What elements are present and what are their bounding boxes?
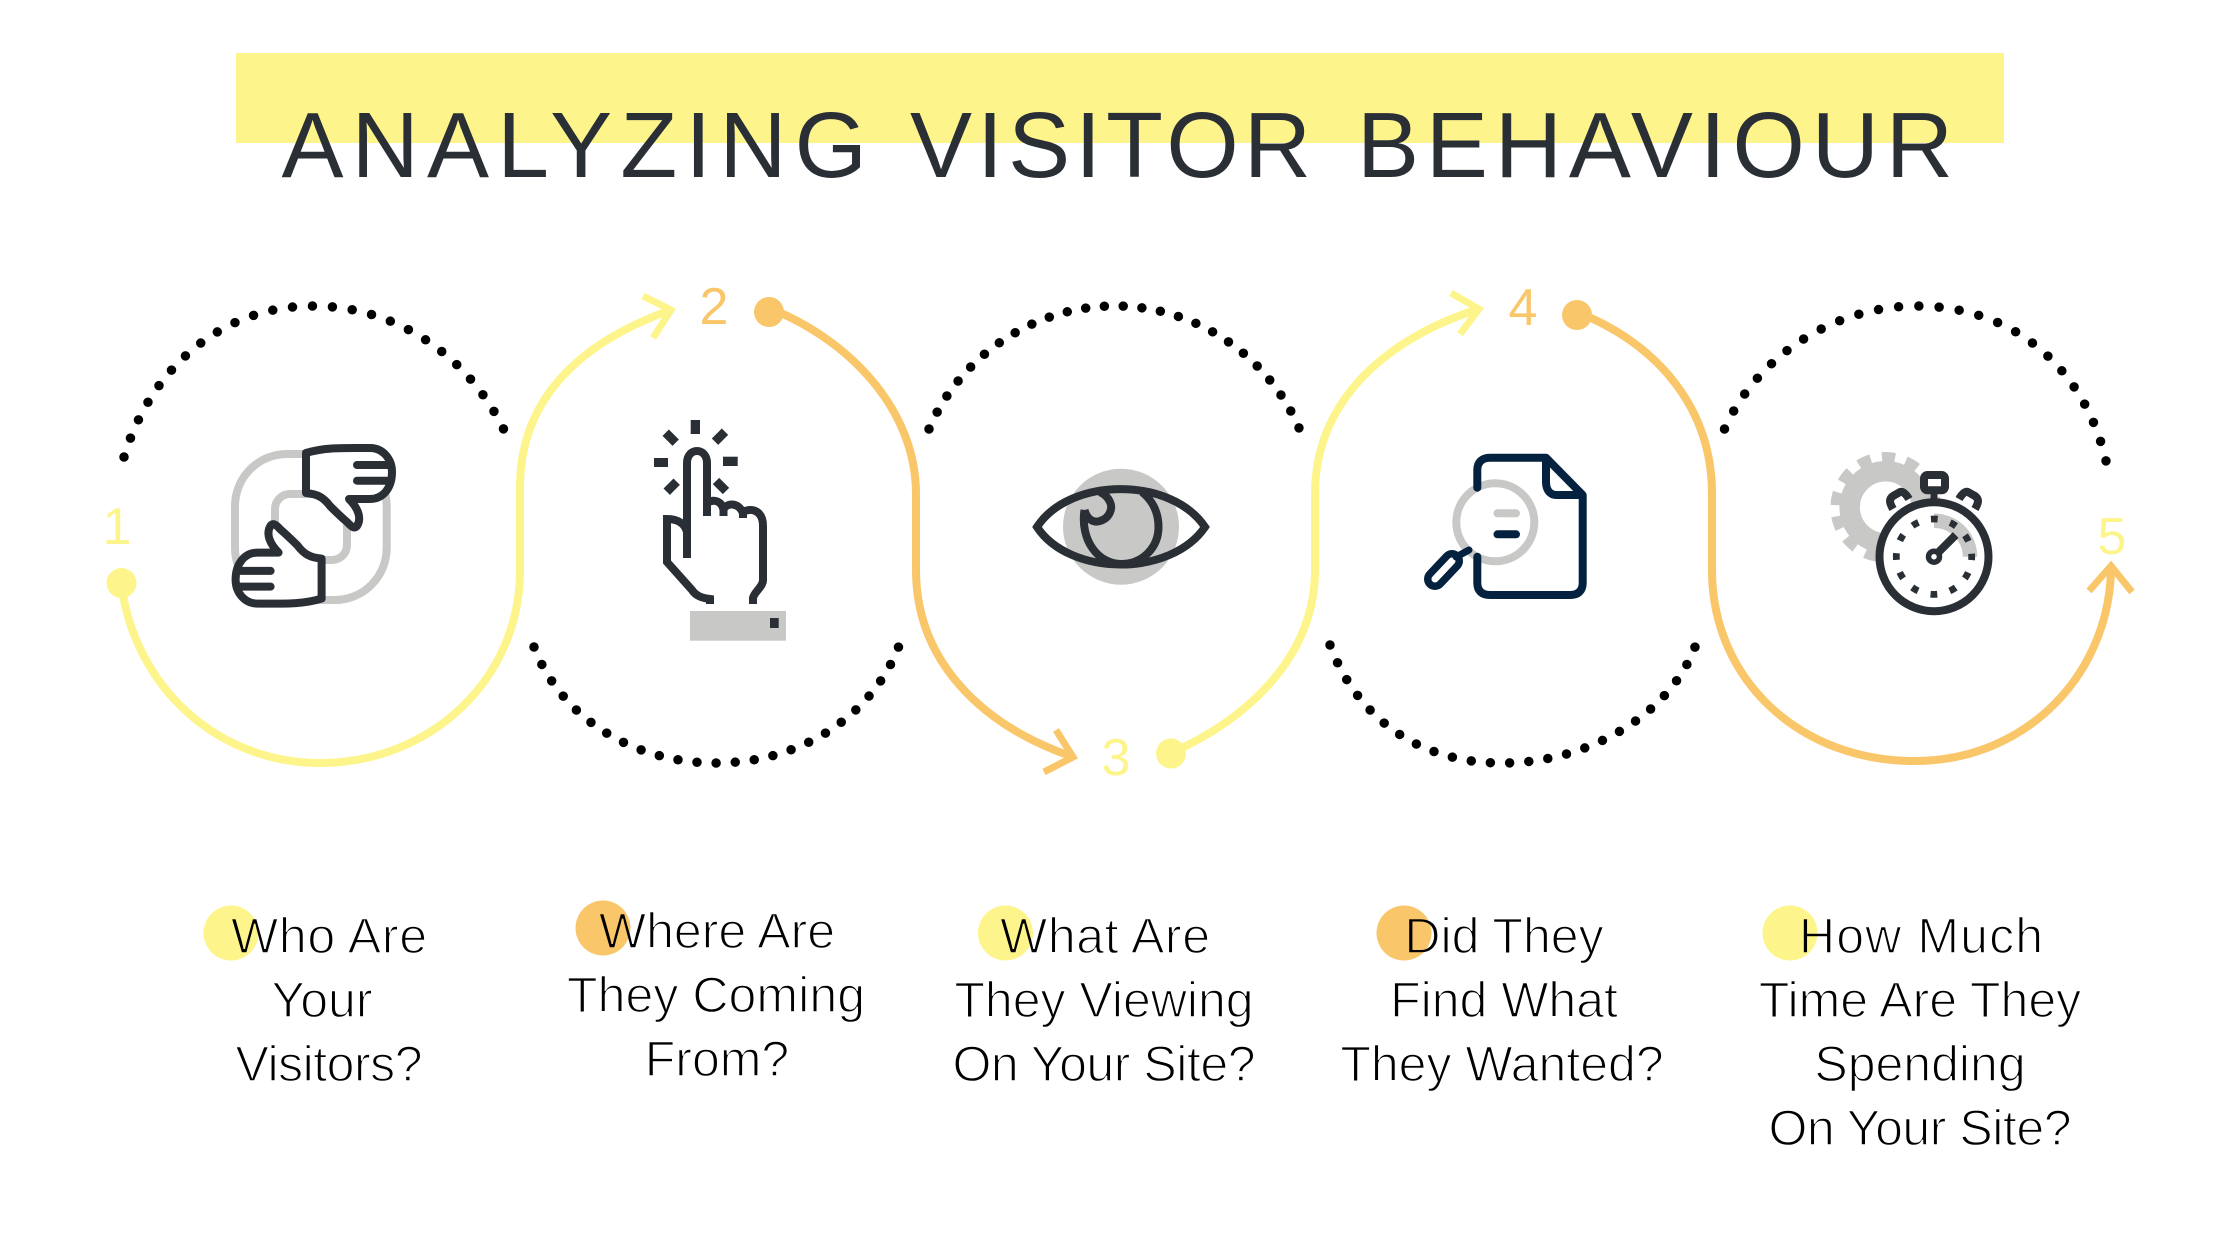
label 2	[567, 900, 865, 1087]
dotted arc: bottom 4	[1330, 645, 1695, 763]
title	[282, 93, 1953, 197]
number 2: 2	[700, 278, 728, 336]
path segment 4: orange loop to step 5	[1562, 300, 2132, 761]
icon: stopwatch and gear	[1824, 445, 1988, 611]
path segment 1: yellow loop to step 2	[106, 296, 671, 763]
label 3: What Are	[1000, 908, 1210, 964]
label 5: Time Are They	[1759, 972, 2081, 1028]
dotted arc: bottom 2	[534, 647, 898, 763]
label 5: Spending	[1814, 1036, 2026, 1092]
dotted arc: top 3	[929, 306, 1299, 429]
label 3: On Your Site?	[952, 1036, 1256, 1092]
title: ANALYZING	[282, 93, 867, 197]
label 4: They Wanted?	[1340, 1036, 1664, 1092]
label 1: Visitors?	[236, 1036, 422, 1092]
path segment 3: yellow curve to step 4	[1156, 293, 1479, 768]
label 2: Where Are	[599, 903, 835, 959]
number 5: 5	[2098, 508, 2126, 566]
icon: document with magnifier	[1435, 458, 1583, 595]
icon: two hands	[235, 448, 392, 604]
label 4: Find What	[1390, 972, 1618, 1028]
label 4: Did They	[1404, 908, 1604, 964]
label 3	[952, 906, 1256, 1092]
number 4: 4	[1509, 279, 1537, 337]
title: BEHAVIOUR	[1357, 93, 1953, 197]
label 1: Your	[271, 972, 373, 1028]
label 5: How Much	[1799, 908, 2043, 964]
label 4	[1340, 906, 1664, 1092]
dotted arc: top 1	[124, 306, 504, 457]
number 1: 1	[103, 498, 131, 556]
icon: pointing hand	[654, 420, 786, 641]
title: VISITOR	[910, 93, 1311, 197]
icon: eye	[1037, 469, 1205, 585]
label 1	[204, 906, 427, 1092]
dotted arc: top 5	[1724, 306, 2106, 461]
label 5	[1759, 906, 2081, 1156]
path segment 2: orange curve to step 3	[754, 297, 1073, 772]
number 3: 3	[1102, 729, 1130, 787]
label 3: They Viewing	[954, 972, 1254, 1028]
label 2: They Coming	[567, 967, 865, 1023]
label 1: Who Are	[231, 908, 427, 964]
title banner	[236, 53, 2004, 197]
label 2: From?	[645, 1031, 789, 1087]
label 5: On Your Site?	[1768, 1100, 2072, 1156]
